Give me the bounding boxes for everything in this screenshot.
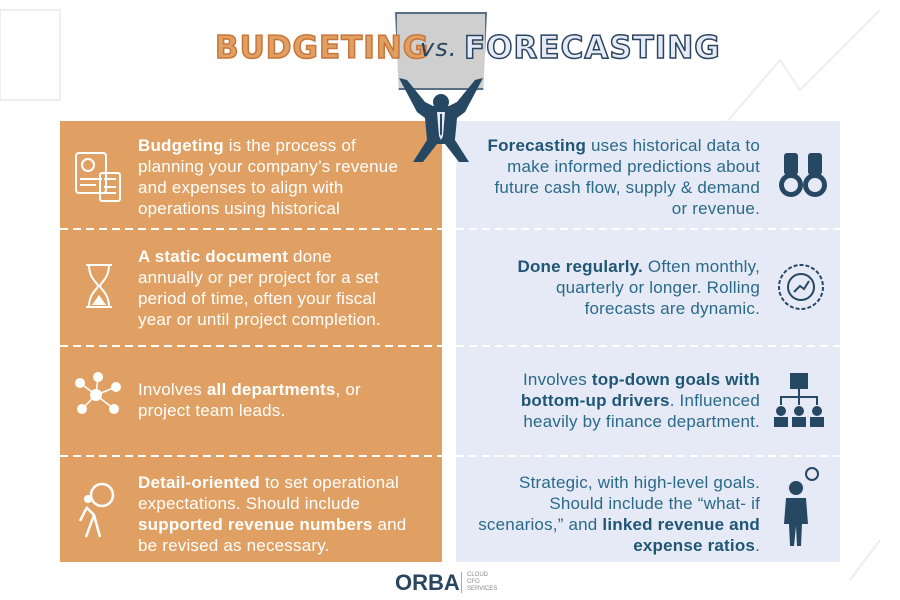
row 1: or revenue. — [672, 199, 760, 218]
row 3 — [521, 370, 760, 431]
row 2 — [138, 247, 381, 329]
row 3: heavily by finance department. — [523, 412, 760, 431]
logo: SERVICES — [467, 586, 497, 592]
row 4: Detail-oriented to set operational — [138, 473, 399, 492]
icon: calculator doc — [75, 152, 121, 202]
row 1: operations using historical — [138, 199, 340, 218]
row 2: year or until project completion. — [138, 310, 381, 329]
row 1: future cash flow, supply & demand — [494, 178, 760, 197]
title right: FORECASTING — [464, 30, 721, 66]
panel: budgeting — [60, 121, 442, 562]
row 3: Involves all departments, or — [138, 380, 361, 399]
row 1 — [138, 136, 398, 218]
row 1: Budgeting is the process of — [138, 136, 356, 155]
icon: thinking man — [784, 467, 819, 546]
icon: man holding sign — [399, 78, 483, 162]
logo: CFO — [467, 579, 480, 585]
row 1: make informed predictions about — [507, 157, 760, 176]
row 3: Involves top-down goals with — [523, 370, 760, 389]
row 4: Strategic, with high-level goals. — [519, 473, 760, 492]
row 4: expense ratios. — [633, 536, 760, 555]
row 2: A static document done — [138, 247, 332, 266]
title vs: vs. — [420, 34, 457, 62]
icon: team network — [75, 372, 121, 414]
row 4: be revised as necessary. — [138, 536, 330, 555]
row 1: planning your company’s revenue — [138, 157, 398, 176]
row 2 — [517, 257, 760, 318]
row 3 — [138, 380, 361, 420]
logo: ORBA — [395, 570, 460, 595]
row 4 — [138, 473, 406, 555]
row 3: project team leads. — [138, 401, 285, 420]
icon: binoculars — [779, 153, 827, 197]
sign board — [395, 12, 487, 90]
title — [215, 30, 721, 66]
row 2: period of time, often your fiscal — [138, 289, 376, 308]
icon: magnifier person — [79, 482, 114, 538]
row 4: Should include the “what- if — [549, 494, 760, 513]
logo: CLOUD — [467, 572, 488, 578]
row 1: Forecasting uses historical data to — [487, 136, 760, 155]
panel: forecasting — [456, 121, 840, 562]
title left: BUDGETING — [215, 30, 429, 66]
row 4: supported revenue numbers and — [138, 515, 406, 534]
row 1 — [487, 136, 760, 218]
row 4: expectations. Should include — [138, 494, 360, 513]
row 2: quarterly or longer. Rolling — [556, 278, 760, 297]
row 1: and expenses to align with — [138, 178, 344, 197]
row 4 — [478, 473, 760, 555]
row 2: forecasts are dynamic. — [585, 299, 760, 318]
icon: org chart — [774, 373, 824, 427]
icon: hourglass — [86, 264, 112, 308]
icon: gear chart — [778, 264, 824, 310]
row 3: bottom-up drivers. Influenced — [521, 391, 760, 410]
row 2: annually or per project for a set — [138, 268, 379, 287]
row 4: scenarios,” and linked revenue and — [478, 515, 760, 534]
logo — [395, 570, 497, 595]
row 2: Done regularly. Often monthly, — [517, 257, 760, 276]
